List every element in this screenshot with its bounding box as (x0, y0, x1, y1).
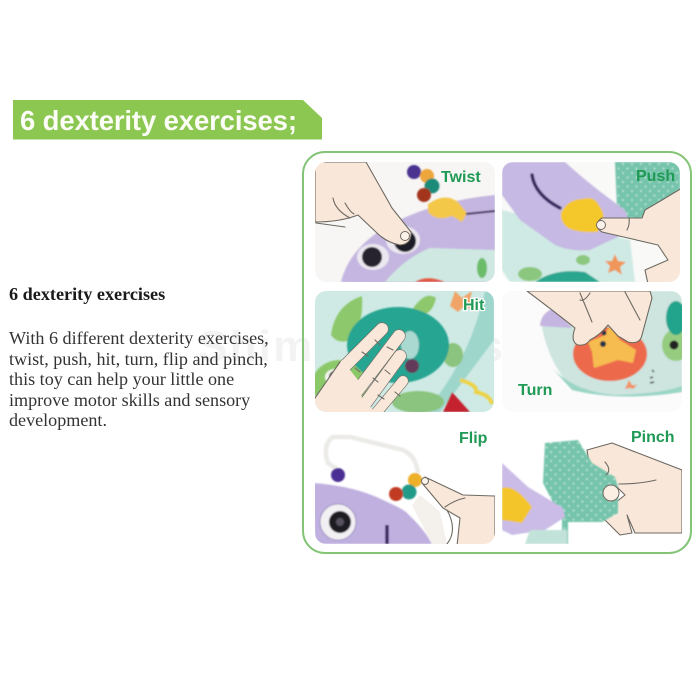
label: Push: Push (636, 168, 675, 185)
body text: development. (9, 410, 107, 430)
hand with four fingers (315, 329, 403, 412)
green title banner: 6 dexterity exercises; (20, 105, 297, 136)
label: Pinch: Pinch (631, 429, 675, 446)
label: Flip: Flip (459, 430, 488, 447)
panel: hit (312, 291, 494, 413)
label: Hit: Hit (463, 297, 485, 314)
body text (9, 328, 269, 430)
watermark: Shimmy Toys (198, 322, 503, 371)
body text: this toy can help your little one (9, 369, 234, 389)
subheading: 6 dexterity exercises (9, 284, 165, 304)
panel: flip (313, 425, 495, 546)
label: Turn: Turn (518, 382, 552, 399)
body text: With 6 different dexterity exercises, (9, 328, 269, 348)
panel: pinch (502, 425, 682, 544)
panel: turn (518, 291, 682, 398)
panel: push (502, 162, 682, 284)
body text: improve motor skills and sensory (9, 390, 250, 410)
rounded green frame (303, 152, 691, 553)
label: Twist: Twist (441, 169, 481, 186)
panel: twist (315, 162, 495, 290)
body text: twist, push, hit, turn, flip and pinch, (9, 348, 268, 368)
